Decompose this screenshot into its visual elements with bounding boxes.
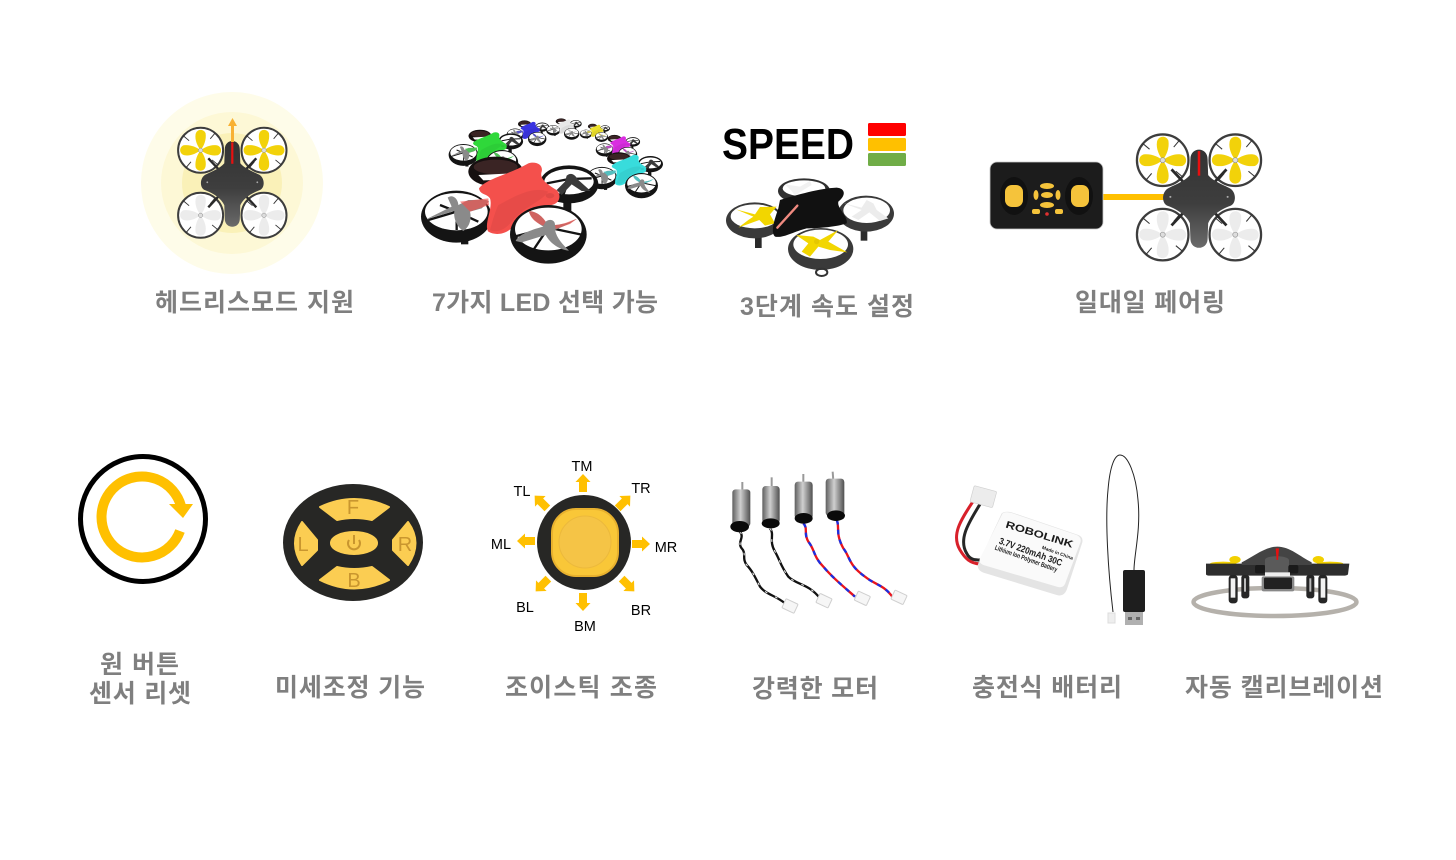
labels: joystick directions: BR (631, 603, 651, 619)
icon: red drone (421, 157, 598, 264)
icon: battery: ROBOLINK (1004, 520, 1075, 551)
panel: headless mode (141, 92, 354, 317)
icon: direction arrows (517, 474, 650, 611)
icon: drone front view (1206, 547, 1349, 603)
panel: fine tuning (275, 484, 425, 702)
heading: auto calibration: 자동 캘리브레이션 (1185, 674, 1383, 702)
icon: button pad: L (297, 534, 309, 556)
heading: joystick: 조이스틱 조종 (505, 674, 657, 702)
icon: landing ring (1194, 588, 1356, 616)
labels: joystick directions: BM (574, 619, 596, 635)
icon: glow circles (141, 92, 323, 274)
icon: black and yellow drone (726, 178, 894, 276)
icon: button pad: B (347, 570, 361, 592)
text: SPEED: SPEED (722, 120, 854, 169)
labels: joystick directions: TL (514, 484, 530, 500)
icon: USB charging cable (1107, 455, 1145, 625)
icon: battery: 3.7V 220mAh 30C (998, 536, 1064, 568)
labels: joystick directions: TM (572, 459, 592, 475)
panel: rechargeable battery (956, 455, 1145, 702)
labels: joystick directions: MR (655, 540, 677, 556)
icon: button pad (283, 484, 423, 601)
labels: joystick directions: TR (631, 481, 651, 497)
panel: 3 speed levels (722, 120, 914, 321)
icon: small coloured drones (449, 118, 663, 198)
heading: battery: 충전식 배터리 (972, 674, 1122, 702)
heading: headless mode: 헤드리스모드 지원 (155, 289, 354, 317)
heading: LED colours: 7가지 LED 선택 가능 (432, 289, 658, 317)
icon: motors with wires (730, 472, 907, 613)
labels: joystick directions (491, 459, 677, 635)
labels: joystick directions: BL (516, 600, 534, 616)
icon: direction arrow (228, 118, 237, 142)
heading: reset: 원 버튼 (100, 651, 179, 679)
icon: button pad: R (398, 534, 412, 556)
labels: joystick directions: ML (491, 537, 511, 553)
heading: fine tuning: 미세조정 기능 (275, 674, 425, 702)
icon: battery: Made in China (1041, 545, 1074, 561)
icon: button pad: F (347, 497, 359, 519)
panel: one-to-one pairing (990, 134, 1261, 317)
icon: speed bars (868, 123, 906, 166)
panel: powerful motors (730, 472, 907, 703)
icon: drone top view (1137, 134, 1261, 260)
icon: joystick (537, 495, 631, 590)
icon: rotation arrow (102, 476, 193, 557)
icon: outer circle (80, 456, 206, 582)
heading: reset: 센서 리셋 (89, 680, 191, 708)
icon: remote controller (990, 162, 1103, 229)
heading: motors: 강력한 모터 (752, 675, 878, 703)
icon: drone top view (178, 128, 286, 238)
icon: pairing line (1103, 194, 1167, 200)
icon: battery: Lithium Ion Polymer Battery (994, 545, 1058, 574)
panel: auto calibration (1185, 547, 1383, 702)
heading: pairing: 일대일 페어링 (1075, 289, 1225, 317)
icon: battery (956, 486, 1083, 596)
panel: 7 LED colours (421, 118, 663, 317)
panel: one button sensor reset (80, 456, 206, 708)
heading: speed levels: 3단계 속도 설정 (740, 293, 914, 321)
panel: joystick (491, 459, 677, 702)
